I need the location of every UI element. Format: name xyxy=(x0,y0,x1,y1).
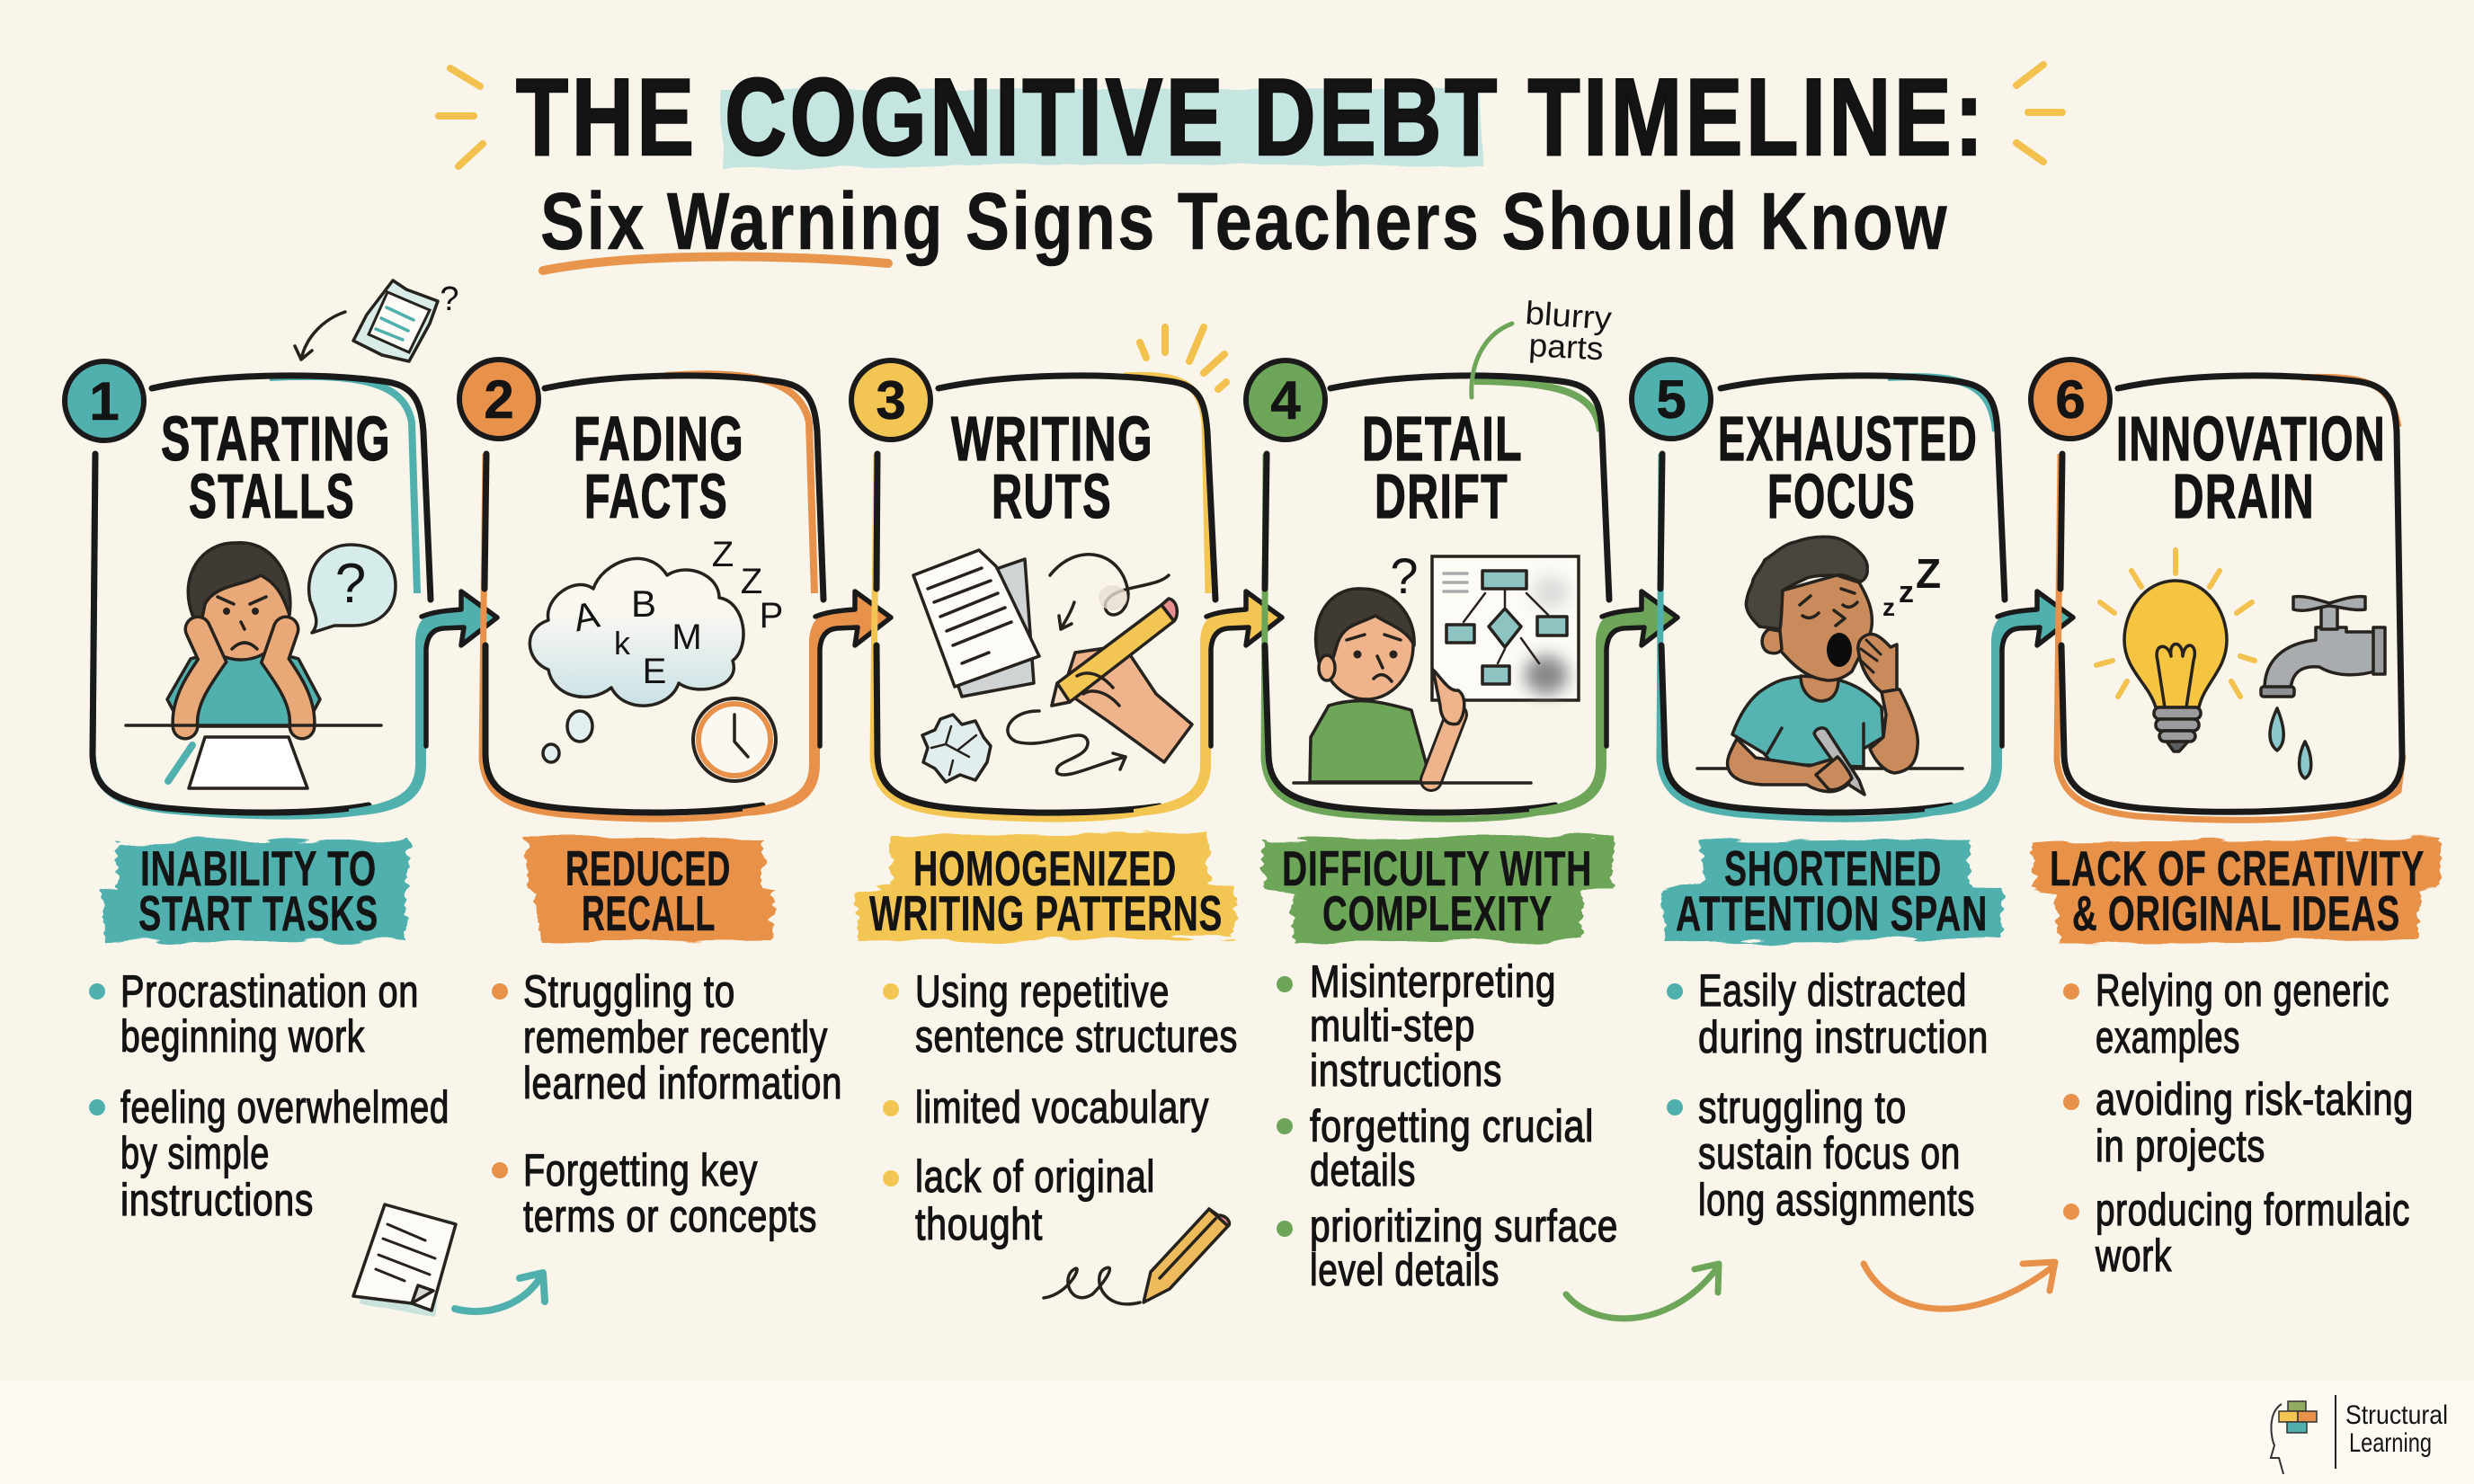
icon: question speech bubble xyxy=(309,545,396,633)
icon: looping scribble arrow xyxy=(1050,555,1169,629)
text block: step 4 bullets: instructions xyxy=(1310,1045,1502,1096)
text block: step 2 bullets: learned information xyxy=(523,1058,842,1108)
text block: step 5 bullets: sustain focus on xyxy=(1698,1128,1961,1178)
heading: exhausted focus xyxy=(1718,404,1978,531)
callout: blurry parts: blurry xyxy=(1524,294,1613,337)
banner: shortened attention span: SHORTENED xyxy=(1724,840,1942,896)
text block: step 1 bullets xyxy=(89,966,449,1225)
heading: detail drift xyxy=(1362,404,1523,531)
banner: difficulty with complexity: COMPLEXITY xyxy=(1322,885,1553,941)
panel: step 1 card xyxy=(65,361,431,816)
heading: detail drift: DETAIL xyxy=(1362,404,1523,474)
text block: step 1 bullets: Procrastination on xyxy=(120,966,419,1017)
banner: shortened attention span: ATTENTION SPAN xyxy=(1676,885,1988,941)
text block: step 4 bullets: details xyxy=(1310,1145,1416,1195)
number badge 4 xyxy=(1246,360,1325,440)
text block: step 4 bullets: Misinterpreting xyxy=(1310,956,1556,1007)
icon: blurry flowchart xyxy=(1432,556,1579,700)
panel: step 2 card xyxy=(459,360,823,819)
icon: fading memory cloud: k xyxy=(614,625,631,662)
callout: blurry parts: parts xyxy=(1528,326,1605,367)
text block: step 3 bullets: Using repetitive xyxy=(915,966,1170,1017)
banner: difficulty with complexity xyxy=(1262,836,1614,944)
arrow: orange swoosh xyxy=(1864,1262,2055,1309)
heading: fading facts: FADING xyxy=(574,404,744,474)
arrow: step 3 to 4 xyxy=(1134,591,1282,816)
icon: yawning student: z xyxy=(1882,593,1895,621)
banner: reduced recall: RECALL xyxy=(582,885,716,941)
text block: step 1 bullets: feeling overwhelmed xyxy=(120,1082,449,1133)
number badge 2: 2 xyxy=(484,369,514,430)
icon: dripping tap xyxy=(2261,597,2385,778)
text block: step 3 bullets: limited vocabulary xyxy=(915,1082,1209,1133)
text block: step 4 bullets xyxy=(1277,956,1618,1295)
panel: step 6 card xyxy=(2031,360,2403,820)
text block: step 3 bullets: thought xyxy=(915,1199,1043,1249)
text block: step 5 bullets: Easily distracted xyxy=(1698,965,1967,1016)
text block: step 5 bullets: struggling to xyxy=(1698,1082,1907,1133)
banner: homogenized writing patterns: WRITING PATTERNS xyxy=(869,885,1223,941)
icon: fading memory cloud xyxy=(530,535,783,762)
arrow: teal swoosh xyxy=(455,1273,545,1311)
logo: Structural Learning xyxy=(2271,1395,2448,1474)
text block: step 2 bullets xyxy=(492,966,842,1241)
heading: starting stalls xyxy=(161,404,391,531)
arrow: step 5 to 6 xyxy=(1925,591,2073,816)
banner: difficulty with complexity: DIFFICULTY WITH xyxy=(1282,840,1592,896)
icon: fading memory cloud: Z xyxy=(741,562,762,601)
panel: step 4 card xyxy=(1246,360,1609,819)
icon: fading memory cloud: B xyxy=(631,582,656,625)
text block: step 3 bullets: sentence structures xyxy=(915,1011,1238,1062)
text block: step 6 bullets: work xyxy=(2095,1231,2172,1281)
decoration: yellow sparkle rays xyxy=(1140,327,1226,389)
text block: step 3 bullets xyxy=(883,966,1238,1249)
text block: step 2 bullets: remember recently xyxy=(523,1012,828,1062)
text block: step 4 bullets: level details xyxy=(1310,1245,1500,1295)
panel: step 5 card xyxy=(1632,360,2005,819)
text block: step 6 bullets: examples xyxy=(2096,1012,2240,1062)
icon: crumpled paper xyxy=(922,715,991,782)
text block: step 2 bullets: terms or concepts xyxy=(523,1191,817,1241)
text block: step 5 bullets xyxy=(1667,965,1989,1225)
number badge 2 xyxy=(459,360,538,439)
number badge 5 xyxy=(1632,360,1711,439)
icon: crumpled document with question mark xyxy=(295,280,459,361)
subtitle: Six Warning Signs Teachers Should Know xyxy=(540,177,1949,267)
icon: fading memory cloud: P xyxy=(760,596,783,635)
banner: inability to start tasks xyxy=(102,840,409,942)
logo: Structural Learning: Learning xyxy=(2349,1428,2432,1458)
icon: fading memory cloud: A xyxy=(569,593,602,639)
text block: step 5 bullets: during instruction xyxy=(1698,1012,1989,1062)
text block: step 2 bullets: Forgetting key xyxy=(523,1145,758,1195)
text block: step 1 bullets: instructions xyxy=(120,1175,314,1225)
icon: fading memory cloud: E xyxy=(643,652,666,691)
text block: step 2 bullets: Struggling to xyxy=(523,966,735,1017)
heading: fading facts: FACTS xyxy=(584,461,728,531)
arrow: step 4 to 5 xyxy=(1529,591,1678,816)
text block: step 5 bullets: long assignments xyxy=(1698,1175,1975,1225)
banner: inability to start tasks: INABILITY TO xyxy=(140,840,377,896)
icon: yawning student: z xyxy=(1899,575,1914,609)
icon: clock xyxy=(693,698,776,781)
icon: question speech bubble: ? xyxy=(335,553,366,615)
number badge 5: 5 xyxy=(1656,369,1686,430)
number badge 6: 6 xyxy=(2055,369,2086,430)
arrow: step 1 to 2 xyxy=(349,591,497,816)
icon: fading memory cloud: M xyxy=(672,618,702,657)
icon: fading memory cloud: Z xyxy=(712,535,734,574)
title: THE COGNITIVE DEBT TIMELINE: xyxy=(516,56,1987,178)
banner: lack of creativity and original ideas xyxy=(2033,838,2440,944)
number badge 1 xyxy=(65,361,144,440)
icon: crumpled document with question mark: ? xyxy=(440,280,459,318)
text block: step 6 bullets: in projects xyxy=(2096,1121,2265,1171)
banner: homogenized writing patterns xyxy=(855,832,1236,942)
heading: starting stalls: STALLS xyxy=(189,461,355,531)
icon: stacked documents xyxy=(913,550,1039,697)
logo: Structural Learning: Structural xyxy=(2345,1400,2448,1430)
banner: shortened attention span xyxy=(1662,840,2002,942)
icon: pencil with squiggle xyxy=(1044,1209,1230,1304)
heading: exhausted focus: FOCUS xyxy=(1767,461,1916,531)
banner: inability to start tasks: START TASKS xyxy=(138,885,378,941)
number badge 3 xyxy=(851,360,930,440)
icon: light bulb xyxy=(2096,550,2255,751)
text block: step 1 bullets: beginning work xyxy=(120,1011,365,1062)
text block: step 4 bullets: multi-step xyxy=(1310,1000,1475,1051)
icon: frustrated student at desk xyxy=(126,543,381,788)
callout: blurry parts xyxy=(1472,294,1613,397)
icon: yawning student: Z xyxy=(1916,550,1941,597)
text block: step 1 bullets: by simple xyxy=(120,1128,270,1178)
text block: step 3 bullets: lack of original xyxy=(915,1151,1155,1202)
arrow: step 2 to 3 xyxy=(743,591,891,816)
number badge 4: 4 xyxy=(1270,370,1301,431)
number badge 6 xyxy=(2031,360,2110,439)
heading: detail drift: DRIFT xyxy=(1375,461,1508,531)
banner: reduced recall: REDUCED xyxy=(565,840,731,896)
heading: starting stalls: STARTING xyxy=(161,404,391,474)
heading: writing ruts xyxy=(951,404,1153,531)
heading: innovation drain: DRAIN xyxy=(2173,461,2315,531)
text block: step 6 bullets xyxy=(2063,965,2414,1281)
text block: step 6 bullets: Relying on generic xyxy=(2096,965,2389,1016)
text block: step 4 bullets: forgetting crucial xyxy=(1310,1101,1594,1151)
icon: hand writing with pencil xyxy=(1008,599,1192,775)
heading: fading facts xyxy=(574,404,744,531)
number badge 1: 1 xyxy=(89,371,120,431)
icon: confused student pointing: ? xyxy=(1390,547,1419,604)
title sun rays left xyxy=(439,68,483,166)
icon: yawning student xyxy=(1697,537,1962,795)
banner: homogenized writing patterns: HOMOGENIZED xyxy=(913,840,1177,896)
icon: confused student pointing xyxy=(1294,547,1531,783)
text block: step 4 bullets: prioritizing surface xyxy=(1310,1201,1618,1251)
heading: exhausted focus: EXHAUSTED xyxy=(1718,404,1978,474)
number badge 3: 3 xyxy=(876,370,906,431)
heading: innovation drain xyxy=(2116,404,2386,531)
banner: reduced recall xyxy=(526,838,775,942)
title sun rays right xyxy=(2016,65,2062,162)
heading: writing ruts: WRITING xyxy=(951,404,1153,474)
arrow: green swoosh xyxy=(1566,1264,1719,1319)
icon: note page with teal wash xyxy=(353,1204,456,1317)
panel: step 3 card xyxy=(851,360,1215,819)
heading: writing ruts: RUTS xyxy=(992,461,1112,531)
